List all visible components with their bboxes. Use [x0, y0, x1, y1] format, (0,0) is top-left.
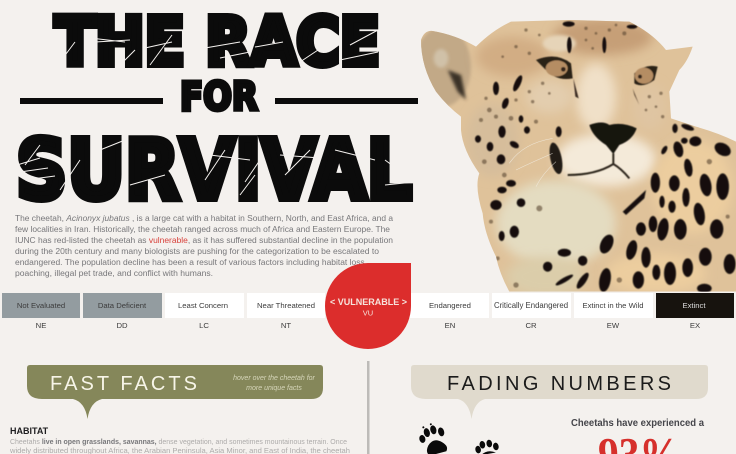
conservation status scale: DD: [116, 321, 128, 330]
conservation status scale: Not Evaluated: [17, 301, 65, 310]
vulnerable teardrop marker: VU: [363, 308, 373, 318]
conservation status scale: LC: [199, 321, 209, 330]
intro paragraph: during the 20th century and many biologists are pushing for the categorization to be escalated to: [15, 246, 379, 256]
panel: fading numbers banner: FADING NUMBERS: [447, 373, 671, 395]
panel: fast facts banner: [27, 365, 323, 419]
habitat text block: Cheetahs live in open grasslands, savannas, dense vegetation, and sometimes mountainous terrain. Once: [10, 437, 347, 446]
eyes: [536, 57, 658, 105]
conservation status scale: NT: [281, 321, 291, 330]
conservation status scale: CR: [525, 321, 537, 330]
intro paragraph: IUNC has red-listed the cheetah as vulnerable, as it has suffered substantial decline in the population: [15, 235, 393, 245]
conservation status scale: EX: [690, 321, 700, 330]
conservation status scale: EN: [445, 321, 455, 330]
intro paragraph: endangered. The population decline has been a result of various factors including habitat loss,: [15, 257, 367, 267]
conservation status scale: NE: [36, 321, 46, 330]
conservation status scale: EW: [607, 321, 620, 330]
title: for with rules: FOR: [180, 75, 258, 120]
panel: fast facts banner: FAST FACTS: [50, 373, 197, 395]
vulnerable teardrop marker: < VULNERABLE >: [330, 297, 407, 307]
panel: fading numbers banner: [411, 365, 708, 419]
conservation status scale: Data Deficient: [98, 301, 147, 310]
intro paragraph: The cheetah, Acinonyx jubatus , is a large cat with a habitat in Southern, North, and East Africa, and a: [15, 213, 393, 223]
conservation status scale: Least Concern: [178, 301, 228, 310]
panel divider: [367, 361, 370, 454]
spots: [475, 21, 736, 293]
small speckles: [479, 24, 730, 288]
conservation status scale: Near Threatened: [257, 301, 315, 310]
conservation status scale: Critically Endangered: [494, 301, 568, 310]
intro paragraph: [15, 213, 393, 278]
whiskers: [509, 138, 556, 187]
title: survival: SURVIVAL: [16, 124, 412, 218]
conservation status scale: Extinct in the Wild: [582, 301, 644, 310]
nose and mouth: [547, 122, 637, 178]
vulnerable teardrop marker: [325, 263, 411, 349]
intro paragraph: poaching, illegal pet trade, and conflict with humans.: [15, 268, 213, 278]
habitat text block: [9, 426, 350, 454]
title: the race: THE RACE: [55, 4, 380, 80]
conservation status scale: Extinct: [682, 301, 706, 310]
cheetah illustration: [414, 18, 736, 297]
statistic: 93 percent decline: Cheetahs have experienced a: [571, 418, 704, 429]
habitat text block: HABITAT: [10, 426, 49, 436]
conservation status scale: Endangered: [429, 301, 471, 310]
panel: fast facts banner: hover over the cheetah for: [233, 375, 316, 382]
icon: paw prints: [416, 420, 500, 454]
panel: fast facts banner: more unique facts: [246, 385, 302, 392]
title: for with rules: [20, 75, 418, 120]
intro paragraph: few localities in Iran. Historically, the cheetah ranged across much of Africa and Eastern Europe. The: [15, 224, 390, 234]
statistic: 93 percent decline: [571, 418, 704, 454]
conservation status scale: [2, 293, 734, 330]
